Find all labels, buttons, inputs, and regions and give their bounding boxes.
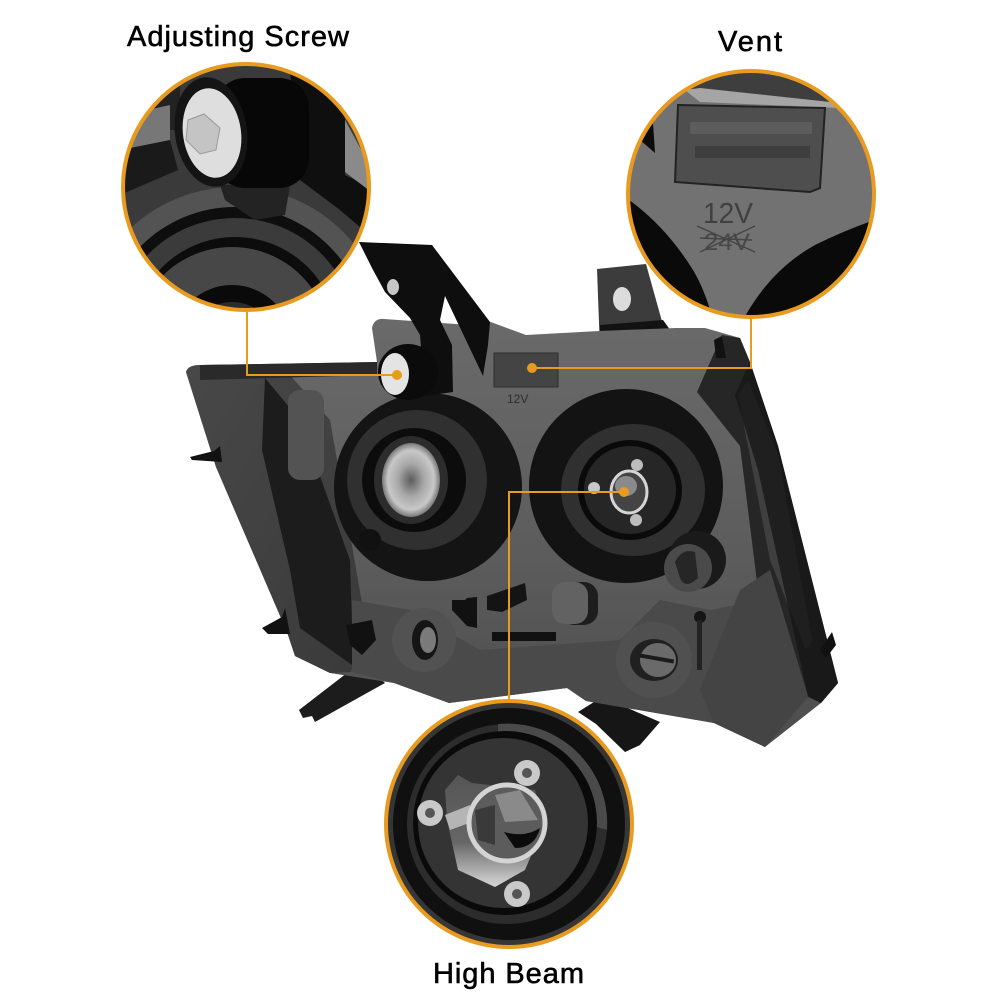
lower panel — [352, 600, 810, 747]
grey plug — [552, 582, 598, 625]
lower bulb socket right — [616, 622, 692, 698]
lower slot — [492, 632, 556, 641]
connector: adjusting screw — [247, 310, 401, 379]
right lens side — [697, 335, 838, 703]
vent patch — [494, 353, 558, 387]
embossed 12V: 12V — [703, 198, 754, 230]
top left mounting bracket — [359, 242, 490, 396]
adjuster cap and bolt — [378, 344, 438, 400]
housing body — [186, 319, 838, 747]
left black arc — [630, 200, 710, 308]
small pin — [694, 611, 706, 670]
vertical grey rib — [288, 390, 324, 480]
top dark band — [691, 73, 830, 102]
black notch — [642, 123, 655, 153]
top right mounting tab — [597, 264, 676, 350]
crossed out 24V: 24V — [704, 229, 750, 256]
callout: high beam — [383, 698, 635, 950]
left small post — [359, 529, 381, 551]
left side panel — [186, 364, 365, 673]
label: high beam: High Beam — [433, 958, 584, 990]
right black arc — [746, 222, 869, 315]
left beam housing — [334, 393, 522, 581]
connector: high beam — [509, 488, 628, 700]
bottom mounting tab — [578, 697, 660, 752]
callout: adjusting screw — [121, 62, 371, 312]
label: adjusting screw: Adjusting Screw — [127, 21, 350, 53]
side clips — [190, 336, 836, 658]
black cap — [226, 78, 309, 188]
embossed voltage mark: 12V — [507, 392, 528, 406]
bulb collar — [469, 785, 545, 861]
shadow under cap — [220, 185, 290, 220]
screws — [417, 760, 540, 907]
crossed out 24V — [697, 226, 755, 256]
headlight assembly — [186, 242, 838, 752]
lower right corner panel — [700, 570, 808, 747]
right beam housing — [529, 389, 723, 583]
centre connectors — [452, 597, 477, 628]
bolt cup — [174, 77, 248, 187]
bulb reflector — [445, 775, 545, 887]
right socket boss — [664, 531, 726, 592]
label: vent: Vent — [718, 26, 782, 58]
striped left backdrop — [125, 86, 180, 193]
lower left mounting bracket — [299, 660, 385, 722]
vent pad — [675, 105, 825, 192]
right black ribs — [290, 74, 367, 227]
connector: vent — [528, 317, 751, 372]
top ridge shadow — [200, 362, 377, 380]
arcs — [132, 188, 353, 260]
white bolt — [182, 88, 242, 178]
lower bulb socket left — [392, 608, 456, 672]
dark recess beside left side panel — [262, 378, 352, 665]
callout: vent — [625, 68, 880, 320]
